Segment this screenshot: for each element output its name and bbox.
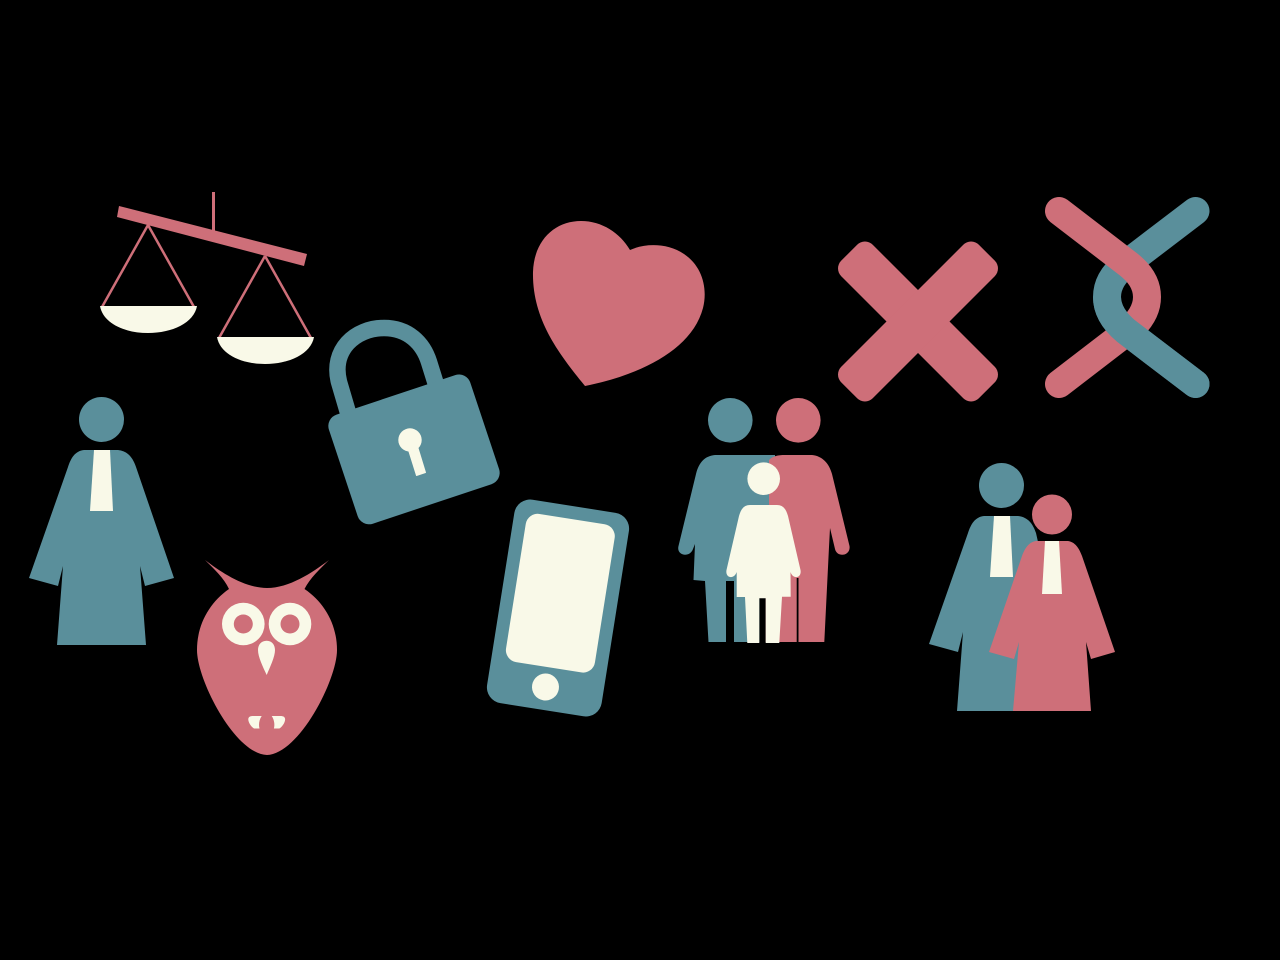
gowned figure: pink [989,494,1115,711]
icon: owl [197,560,337,755]
icon: smartphone [485,497,631,719]
icon: single gowned figure [29,397,174,645]
icon: chain link [1059,211,1210,398]
icon: balance scales [100,192,314,364]
icon: couple in gowns [929,463,1115,711]
icon: heart [533,221,705,386]
child figure [726,462,801,643]
gowned figure: teal [929,463,1060,711]
adult figure: teal [678,398,775,642]
icon: family of three [678,398,850,643]
adult figure: pink [760,398,850,642]
icon: padlock [325,328,503,527]
icon: cross [833,237,1003,406]
